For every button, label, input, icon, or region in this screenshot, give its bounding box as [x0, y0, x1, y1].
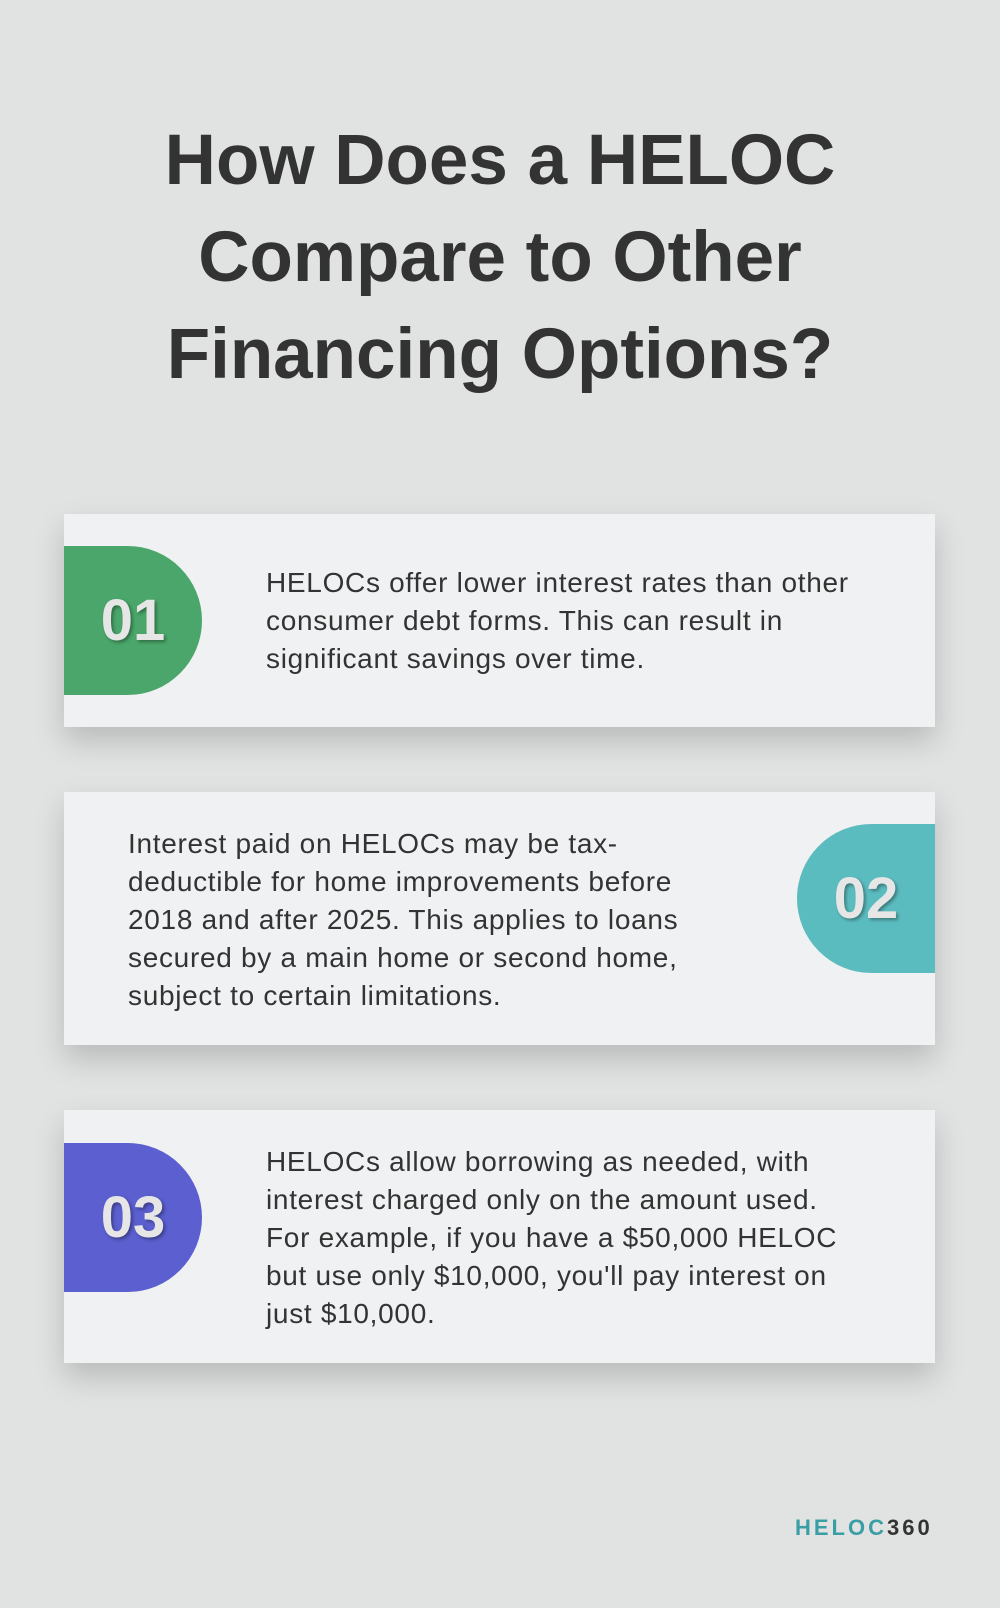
text 3: [265, 1146, 837, 1329]
title: [165, 121, 835, 394]
title: How Does a HELOC: [165, 121, 835, 200]
panel: card 2: [64, 792, 935, 1045]
text 3: but use only $10,000, you'll pay interest on: [266, 1260, 827, 1291]
text 2: 2018 and after 2025. This applies to loans: [128, 904, 678, 935]
text 3: HELOCs allow borrowing as needed, with: [266, 1146, 809, 1177]
badge 03: 03: [101, 1185, 165, 1250]
text 2: [128, 828, 678, 1011]
text 3: interest charged only on the amount used.: [266, 1184, 818, 1215]
text 1: consumer debt forms. This can result in: [266, 605, 783, 636]
text 2: Interest paid on HELOCs may be tax-: [128, 828, 618, 859]
title: Compare to Other: [198, 218, 802, 297]
panel: card 3: [64, 1110, 935, 1363]
text 1: significant savings over time.: [266, 643, 645, 674]
text 3: For example, if you have a $50,000 HELOC: [266, 1222, 837, 1253]
badge 03: [64, 1143, 202, 1292]
text 2: subject to certain limitations.: [128, 980, 501, 1011]
text 2: deductible for home improvements before: [128, 866, 672, 897]
badge 01: [64, 546, 202, 695]
text 3: just $10,000.: [266, 1298, 435, 1329]
text 1: HELOCs offer lower interest rates than other: [266, 567, 849, 598]
text 1: [266, 567, 849, 674]
badge 02: 02: [834, 866, 898, 931]
panel: card 1: [64, 514, 935, 727]
logo: HELOC360: [795, 1515, 933, 1540]
text 2: secured by a main home or second home,: [128, 942, 678, 973]
badge 02: [797, 824, 935, 973]
title: Financing Options?: [167, 315, 833, 394]
badge 01: 01: [101, 588, 165, 653]
